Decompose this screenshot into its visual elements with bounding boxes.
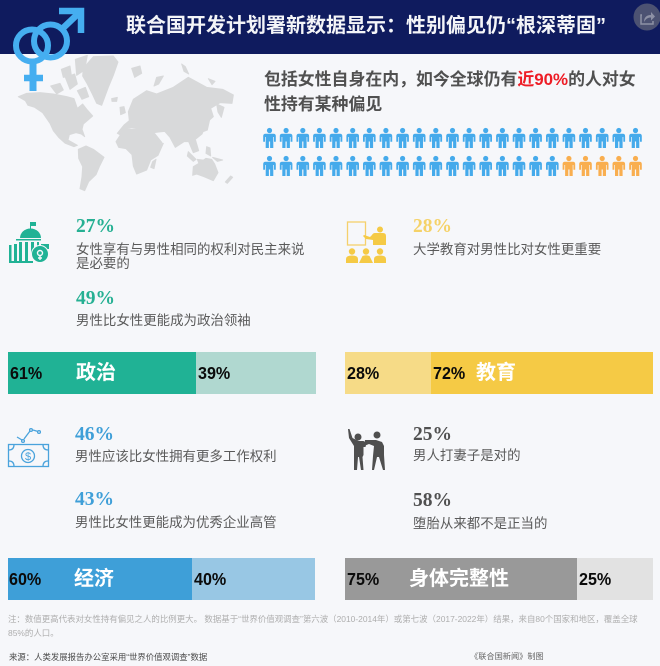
- segment 39%: 39%: [198, 363, 230, 383]
- segment 75%: [345, 558, 577, 600]
- segment 61%: 61%: [10, 363, 42, 383]
- stat: economy 43%: [75, 488, 277, 530]
- stat: body 58%: [413, 490, 547, 530]
- headline text: 包括女性自身在内，如今全球仍有近90%的人对女性持有某种偏见: [264, 70, 636, 114]
- segment 28%: [345, 352, 431, 394]
- description: 堕胎从来都不是正当的: [413, 516, 547, 530]
- footnote: 注：数值更高代表对女性持有偏见之人的比例更大。 数据基于“世界价值观调查”第六波（2010-2014年）或第七波（2017-2022年）结果，来自80个国家和地区，覆盖全球: [8, 614, 638, 624]
- segment 25%: [577, 558, 653, 600]
- segment 60%: 经济: [74, 568, 114, 590]
- description: 大学教育对男性比对女性更重要: [413, 242, 601, 257]
- pictogram: 41 of 46 people blue, 5 orange: [263, 128, 642, 176]
- icon: gender symbols: [13, 8, 84, 91]
- icon: teacher and class: [346, 221, 386, 263]
- bar: bodily integrity: [345, 558, 653, 600]
- stat: education 28%: [413, 216, 601, 257]
- segment 72%: [431, 352, 653, 394]
- header banner: [0, 0, 660, 54]
- bar: economy: [8, 558, 315, 600]
- stat: body 25%: [413, 424, 521, 463]
- title: 联合国开发计划署新数据显示：性别偏见仍“根深蒂固”: [126, 15, 606, 37]
- stat: politics 27%: [76, 216, 304, 271]
- segment 25%: 25%: [579, 569, 611, 589]
- value: 49%: [76, 288, 115, 308]
- value: 28%: [413, 216, 452, 237]
- footnote: [8, 614, 638, 638]
- segment 61%: [8, 352, 196, 394]
- value: 46%: [75, 424, 114, 444]
- segment 39%: [196, 352, 316, 394]
- segment 72%: 72%: [433, 363, 465, 383]
- segment 61%: 政治: [76, 362, 116, 384]
- segment 60%: 60%: [9, 569, 41, 589]
- description: 男性比女性更能成为政治领袖: [76, 313, 251, 328]
- icon: banknote and trend: $: [25, 451, 31, 463]
- world map: [18, 55, 234, 191]
- segment 72%: 教育: [476, 362, 516, 384]
- description: 男人打妻子是对的: [413, 448, 521, 463]
- description: 女性享有与男性相同的权利对民主来说是必要的: [76, 242, 304, 271]
- icon: two figures in conflict: [348, 429, 385, 470]
- value: 25%: [413, 424, 452, 444]
- description: 男性比女性更能成为优秀企业高管: [75, 514, 277, 530]
- segment 28%: 28%: [347, 363, 379, 383]
- segment 40%: 40%: [194, 569, 226, 589]
- stat: economy 46%: [75, 424, 277, 464]
- description: 男性应该比女性拥有更多工作权利: [75, 449, 277, 464]
- icon: banknote and trend: [8, 428, 50, 468]
- stat: politics 49%: [76, 288, 251, 328]
- bar: politics: [8, 352, 316, 394]
- value: 27%: [76, 216, 115, 237]
- bar: education: [345, 352, 653, 394]
- segment 75%: 75%: [347, 569, 379, 589]
- segment 60%: [8, 558, 192, 600]
- source: 来源：人类发展报告办公室采用“世界价值观调查”数据: [9, 652, 207, 662]
- value: 43%: [75, 488, 114, 510]
- icon: parliament building: [9, 222, 49, 263]
- value: 58%: [413, 490, 452, 510]
- segment 40%: [192, 558, 315, 600]
- share button: [634, 4, 660, 30]
- credit: 《联合国新闻》制图: [470, 652, 544, 661]
- segment 75%: 身体完整性: [409, 568, 509, 590]
- footnote: 85%的人口。: [8, 628, 59, 638]
